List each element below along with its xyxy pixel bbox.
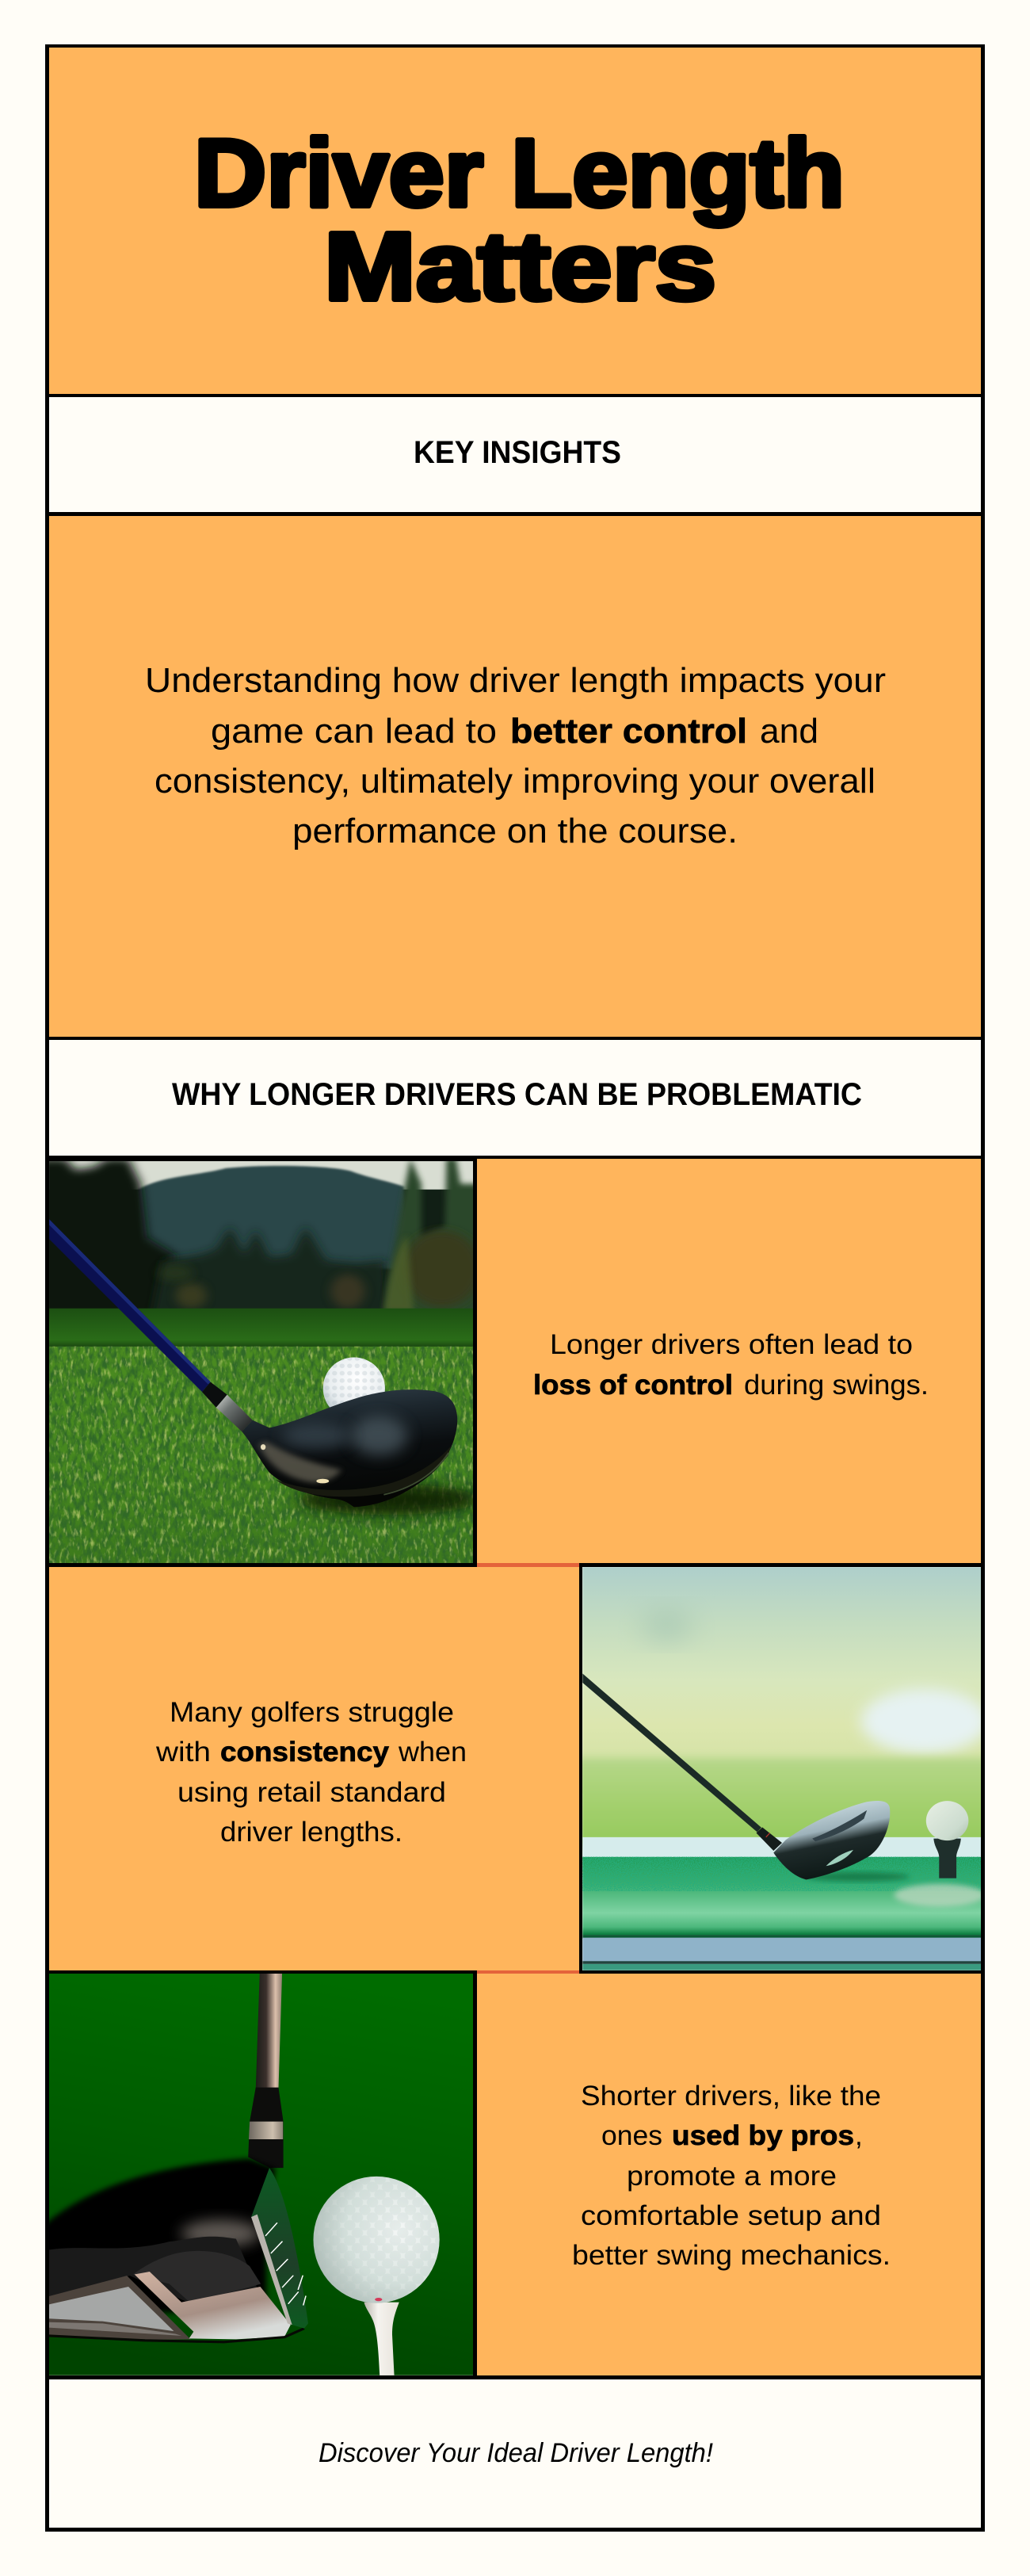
club head xyxy=(42,2158,308,2342)
panel: why longer drivers heading: WHY LONGER DRIVERS CAN BE PROBLEMATIC xyxy=(172,1077,862,1112)
photo: driver on practice mat xyxy=(573,1567,998,1973)
club shaft xyxy=(582,1673,782,1851)
club shaft xyxy=(49,1219,253,1431)
panel: longer drivers text: loss of control xyxy=(533,1370,733,1401)
panel: why longer drivers heading xyxy=(47,1038,983,1157)
photo: driver face and ball on tee xyxy=(42,1974,473,2377)
panel: shorter drivers text: comfortable setup and xyxy=(581,2200,881,2231)
panel: consistency text: using retail standard xyxy=(177,1777,446,1808)
panel: key insights heading: KEY INSIGHTS xyxy=(414,435,621,470)
panel: longer drivers text xyxy=(475,1157,983,1565)
panel: consistency text: driver lengths. xyxy=(220,1817,402,1848)
panel: shorter drivers text: ones xyxy=(601,2120,662,2151)
panel: consistency text xyxy=(47,1565,581,1972)
panel: shorter drivers text xyxy=(475,1972,983,2377)
panel: consistency text: Many golfers struggle xyxy=(170,1697,454,1728)
panel: intro text xyxy=(47,514,983,1038)
panel: footer call to action xyxy=(47,2378,983,2529)
club head xyxy=(242,1389,457,1507)
golf tee xyxy=(364,2303,399,2377)
panel: key insights heading xyxy=(47,396,983,514)
panel: consistency text: consistency xyxy=(220,1737,390,1768)
title xyxy=(194,119,845,320)
club shaft xyxy=(248,1974,284,2168)
accent line: lower red connector xyxy=(477,1970,579,1974)
intro paragraph: consistency, ultimately improving your overall xyxy=(154,762,876,801)
club head xyxy=(773,1801,890,1879)
title: Matters xyxy=(324,212,716,320)
intro paragraph xyxy=(145,661,886,850)
title: Driver Length xyxy=(194,119,845,227)
panel: shorter drivers text: Shorter drivers, like the xyxy=(581,2081,881,2112)
intro paragraph: Understanding how driver length impacts your xyxy=(145,661,886,700)
golf ball xyxy=(313,2177,440,2303)
panel: shorter drivers text: promote a more xyxy=(627,2161,837,2192)
intro paragraph: performance on the course. xyxy=(292,812,738,850)
panel: shorter drivers text: used by pros xyxy=(672,2120,854,2151)
intro paragraph: and xyxy=(760,712,818,751)
intro paragraph: game can lead to xyxy=(211,712,497,751)
panel: shorter drivers text: better swing mechanics. xyxy=(572,2240,891,2271)
panel: title xyxy=(47,46,983,396)
photo: driver and ball on fairway xyxy=(32,1158,483,1565)
accent line: upper red connector xyxy=(477,1563,579,1567)
panel: consistency text: with xyxy=(155,1737,211,1768)
intro paragraph: better control xyxy=(510,712,747,751)
golf ball xyxy=(323,1357,385,1408)
golf ball on rubber tee xyxy=(926,1801,968,1878)
panel: shorter drivers text: , xyxy=(855,2120,863,2151)
panel: consistency text: when xyxy=(398,1737,467,1768)
panel: longer drivers text: during swings. xyxy=(744,1370,929,1401)
panel: footer call to action: Discover Your Ideal Driver Length! xyxy=(319,2438,714,2468)
panel: longer drivers text: Longer drivers often lead to xyxy=(550,1329,913,1360)
